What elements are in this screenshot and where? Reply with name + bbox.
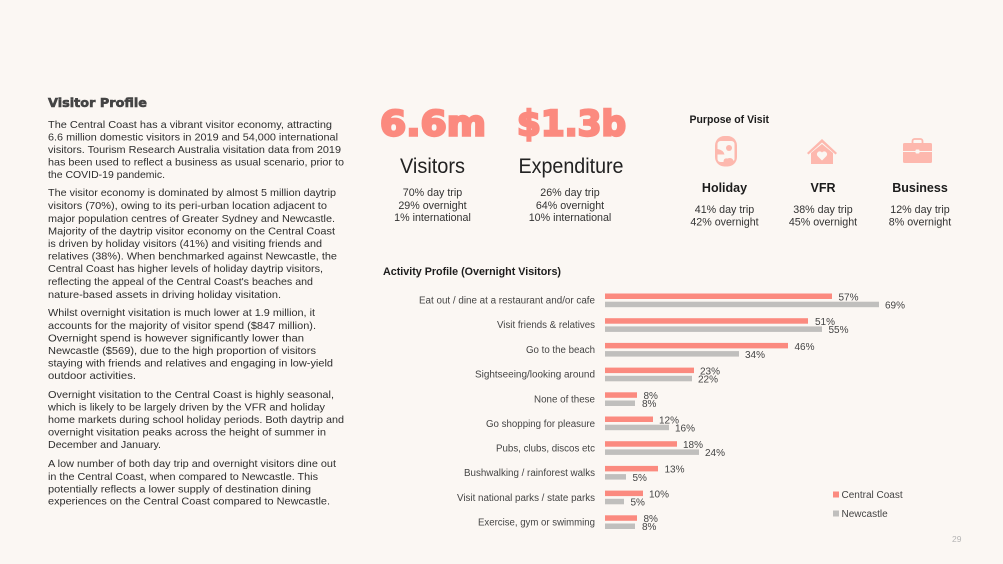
- stat: expenditure: 10% international: [529, 212, 611, 224]
- row: visit friends: 55%: [828, 325, 849, 336]
- stat: expenditure: [517, 104, 626, 224]
- purpose: VFR: 45% overnight: [789, 216, 857, 228]
- row: beach: 46%: [794, 342, 815, 353]
- text block: visitor profile narrative: overnight visitation peaks across the height of summer in: [48, 426, 326, 438]
- text block: visitor profile narrative: visitors. Tourism Research Australia visitation data from 2019: [48, 144, 341, 156]
- text block: visitor profile narrative: is driven by holiday visitors (41%) and visiting friends and: [48, 238, 322, 250]
- page number: 29: [952, 534, 962, 544]
- row: sightseeing: Sightseeing/looking around: [475, 370, 595, 380]
- text block: visitor profile narrative: December and January.: [48, 439, 161, 451]
- row: beach: [526, 342, 815, 361]
- icon: briefcase: [903, 139, 932, 163]
- row: none of these: 8%: [644, 391, 658, 402]
- text block: visitor profile narrative: Overnight spend is however significantly lower than: [48, 332, 304, 344]
- bar chart: activity profile: [419, 292, 905, 533]
- purpose: VFR: 38% day trip: [793, 204, 853, 216]
- row: shopping: Go shopping for pleasure: [486, 419, 595, 430]
- row: beach: Go to the beach: [526, 345, 595, 356]
- text block: visitor profile narrative: Newcastle ($569), due to the high proportion of visitors: [48, 345, 316, 357]
- text block: visitor profile narrative: major population centres of Greater Sydney and Newcastle.: [48, 213, 335, 225]
- stat: expenditure: Expenditure: [518, 155, 624, 178]
- legend: [833, 490, 903, 520]
- text block: visitor profile narrative: Central Coast has higher levels of holiday daytrip visitors,: [48, 263, 323, 275]
- row: sightseeing: 22%: [698, 374, 718, 386]
- row: national parks: [457, 490, 669, 508]
- text block: visitor profile narrative: A low number of both day trip and overnight visitors dine out: [48, 458, 336, 470]
- stat: visitors: 29% overnight: [398, 200, 467, 212]
- text block: visitor profile narrative: visitors (70%), owing to its peri-urban location adjacent to: [48, 200, 327, 212]
- stat: expenditure: 26% day trip: [540, 187, 600, 199]
- heading: Activity Profile: Activity Profile (Overnight Visitors): [383, 266, 561, 278]
- text block: visitor profile narrative: which is likely to be largely driven by the VFR and holiday: [47, 402, 326, 414]
- purpose: business: 12% day trip: [890, 204, 950, 216]
- row: shopping: 16%: [675, 424, 695, 434]
- row: bushwalking: Bushwalking / rainforest walks: [464, 468, 595, 479]
- row: visit friends: Visit friends & relatives: [497, 320, 595, 331]
- text block: visitor profile narrative: in the Central Coast, when compared to Newcastle. This: [48, 471, 318, 483]
- row: pubs: Pubs, clubs, discos etc: [496, 444, 595, 454]
- stat: visitors: 1% international: [394, 212, 471, 224]
- text block: visitor profile narrative: 6.6 million domestic visitors in 2019 and 54,000 international: [48, 132, 338, 144]
- row: bushwalking: 5%: [632, 473, 647, 484]
- purpose: VFR: VFR: [810, 181, 836, 195]
- row: eat out: Eat out / dine at a restaurant and/or cafe: [419, 296, 595, 306]
- row: none of these: 8%: [642, 399, 657, 410]
- purpose: holiday: Holiday: [702, 181, 747, 195]
- text block: visitor profile narrative: [47, 119, 344, 508]
- text block: visitor profile narrative: potentially reflects a lower supply of destination dining: [48, 484, 311, 496]
- text block: visitor profile narrative: The Central Coast has a vibrant visitor economy, attracting: [48, 119, 332, 131]
- row: national parks: Visit national parks / state parks: [457, 493, 595, 504]
- text block: visitor profile narrative: has been used to reflect a business as usual scenario, prior to: [48, 156, 344, 168]
- text block: visitor profile narrative: experiences on the Central Coast compared to Newcastle.: [48, 496, 330, 508]
- row: national parks: 5%: [630, 498, 645, 508]
- text block: visitor profile narrative: nature-based assets in driving holiday visitation.: [48, 289, 281, 301]
- stat: expenditure: 64% overnight: [536, 200, 604, 212]
- purpose: holiday: [690, 181, 759, 228]
- heading: Visitor Profile: Visitor Profile: [48, 95, 147, 110]
- row: none of these: [534, 391, 658, 410]
- row: pubs: [496, 440, 725, 459]
- row: eat out: 57%: [838, 292, 859, 304]
- text block: visitor profile narrative: the COVID-19 pandemic.: [48, 169, 165, 181]
- legend: Central Coast: [842, 490, 903, 501]
- stat: visitors: Visitors: [400, 155, 465, 178]
- row: sightseeing: 23%: [700, 366, 720, 378]
- row: exercise: 8%: [644, 514, 658, 525]
- row: exercise: [478, 514, 658, 533]
- row: visit friends: [497, 317, 849, 336]
- stat: visitors: [380, 104, 486, 224]
- purpose: business: 8% overnight: [889, 216, 951, 228]
- text block: visitor profile narrative: staying with friends and relatives and engaging in low-yield: [48, 358, 333, 370]
- purpose: VFR: [789, 181, 857, 228]
- row: visit friends: 51%: [815, 317, 835, 328]
- purpose: business: Business: [892, 181, 948, 195]
- text block: visitor profile narrative: home markets during school holiday periods. Both daytrip and: [48, 414, 344, 426]
- row: shopping: [486, 416, 695, 434]
- row: pubs: 18%: [683, 440, 703, 451]
- row: exercise: Exercise, gym or swimming: [478, 518, 595, 528]
- row: national parks: 10%: [649, 490, 669, 500]
- row: eat out: [419, 292, 905, 312]
- icon: house with heart: [807, 139, 837, 164]
- row: exercise: 8%: [642, 522, 657, 533]
- text block: visitor profile narrative: relatives (38%). When benchmarked against Newcastle, the: [48, 250, 337, 262]
- row: sightseeing: [475, 366, 720, 386]
- purpose: holiday: 42% overnight: [690, 216, 759, 228]
- icon: aeroplane window: [715, 136, 737, 166]
- row: pubs: 24%: [705, 448, 725, 459]
- text block: visitor profile narrative: Overnight visitation to the Central Coast is highly seasonal,: [48, 389, 334, 401]
- text block: visitor profile narrative: accounts for the majority of visitor spend ($847 million).: [48, 320, 316, 332]
- text block: visitor profile narrative: reflecting the appeal of the Central Coast's beaches and: [48, 276, 313, 288]
- stat: visitors: 6.6m: [380, 104, 486, 144]
- text block: visitor profile narrative: outdoor activities.: [48, 370, 136, 382]
- text block: visitor profile narrative: Majority of the daytrip visitor economy on the Central Coast: [48, 226, 335, 238]
- text block: visitor profile narrative: Whilst overnight visitation is much lower at 1.9 million, it: [48, 307, 315, 319]
- row: shopping: 12%: [659, 416, 679, 426]
- row: none of these: None of these: [534, 394, 595, 406]
- row: bushwalking: 13%: [664, 464, 685, 476]
- row: bushwalking: [464, 464, 685, 484]
- stat: visitors: 70% day trip: [403, 187, 462, 199]
- stat: expenditure: $1.3b: [517, 104, 626, 144]
- purpose: holiday: 41% day trip: [695, 204, 754, 216]
- row: beach: 34%: [745, 350, 765, 361]
- legend: Newcastle: [842, 509, 888, 520]
- purpose: business: [889, 181, 951, 228]
- row: eat out: 69%: [885, 300, 905, 312]
- heading: Purpose of Visit: Purpose of Visit: [690, 114, 769, 126]
- text block: visitor profile narrative: The visitor economy is dominated by almost 5 million daytrip: [48, 187, 336, 199]
